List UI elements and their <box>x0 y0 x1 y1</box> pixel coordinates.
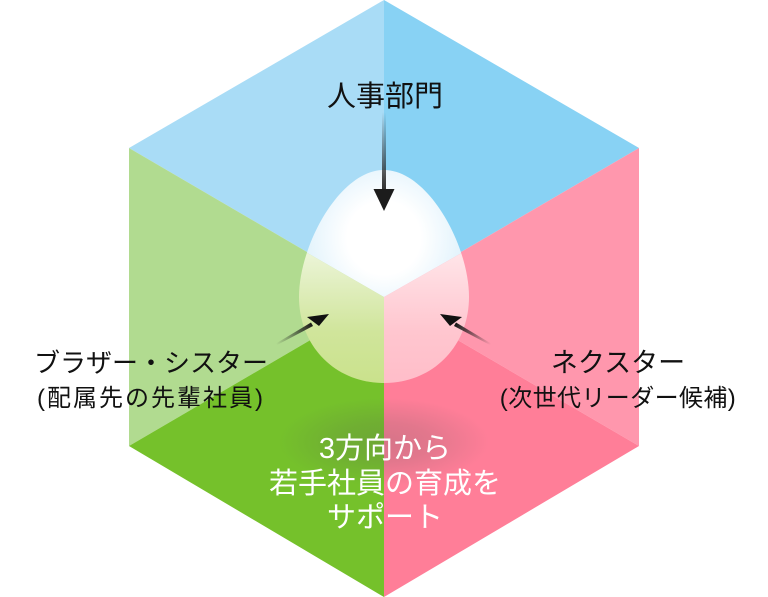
egg: right section <box>384 253 469 383</box>
soft shadow behind message <box>279 398 489 486</box>
center message <box>269 432 501 534</box>
label: nexter <box>500 348 736 412</box>
egg: left section <box>299 252 384 383</box>
panel: bottom-left green <box>129 297 384 597</box>
panel: right light pink <box>384 148 639 446</box>
label: brother sister <box>34 348 268 412</box>
label: brother sister: (配属先の先輩社員) <box>37 385 265 412</box>
label: nexter: (次世代リーダー候補) <box>500 385 736 412</box>
hexagon diagram <box>129 0 639 597</box>
arrow: top pointing down <box>374 112 394 211</box>
arrow: right pointing to egg <box>440 314 491 345</box>
arrow: left pointing to egg <box>276 314 329 345</box>
panel: left light green <box>129 148 384 446</box>
heading: HR department: 人事部門 <box>327 80 443 113</box>
label: nexter: ネクスター <box>551 348 685 378</box>
center message: 3方向から <box>319 432 451 465</box>
center message: 若手社員の育成を <box>269 467 501 500</box>
egg <box>299 170 469 383</box>
egg: top section <box>307 170 462 297</box>
center message: サポート <box>327 501 443 534</box>
panel: bottom-right pink <box>384 297 639 597</box>
label: brother sister: ブラザー・シスター <box>34 348 268 378</box>
panel: top-right blue <box>384 0 639 297</box>
panel: top-left light blue <box>129 0 384 297</box>
